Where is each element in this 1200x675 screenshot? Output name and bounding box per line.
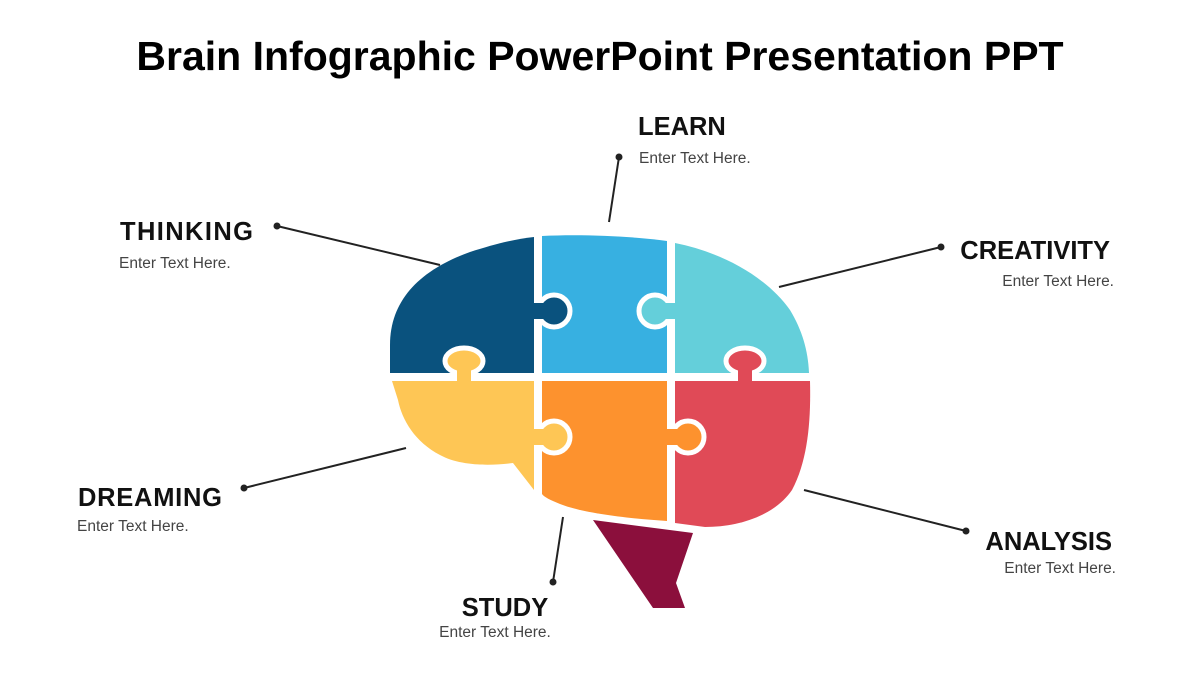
piece: dark blue (thinking)	[390, 237, 534, 373]
connector: thinking	[274, 222, 440, 265]
piece: teal (creativity)	[675, 243, 809, 373]
label: creativity: Enter Text Here.	[1002, 273, 1114, 290]
label: study: STUDY	[462, 594, 548, 622]
label: dreaming	[77, 484, 222, 535]
knob: yellow into dark blue	[445, 348, 483, 384]
brain puzzle	[390, 235, 810, 608]
piece: stem	[593, 520, 693, 608]
connector: dreaming	[240, 448, 406, 492]
knob: teal into light blue	[639, 295, 681, 327]
label: analysis	[985, 528, 1116, 577]
label: dreaming: Enter Text Here.	[77, 518, 189, 535]
label: analysis: Enter Text Here.	[1004, 560, 1116, 577]
label: study	[439, 594, 551, 641]
connector: creativity	[779, 244, 944, 287]
label: analysis: ANALYSIS	[985, 528, 1112, 556]
label: dreaming: DREAMING	[78, 484, 222, 512]
label: learn: Enter Text Here.	[639, 150, 751, 167]
knob: dark blue into light blue	[528, 295, 570, 327]
piece: light blue (learn)	[542, 235, 667, 373]
knob: yellow into orange	[528, 421, 570, 453]
piece: orange (study)	[542, 381, 667, 521]
label: learn	[638, 113, 751, 167]
label: thinking	[119, 218, 253, 272]
connector: analysis	[804, 490, 970, 534]
label: thinking: Enter Text Here.	[119, 255, 231, 272]
piece: yellow (dreaming)	[392, 381, 534, 490]
label: creativity: CREATIVITY	[960, 237, 1110, 265]
label: learn: LEARN	[638, 113, 726, 141]
knob: red into teal	[726, 348, 764, 384]
title: Brain Infographic PowerPoint Presentation PPT	[136, 33, 1064, 79]
connector: study	[550, 517, 563, 586]
connector: learn	[609, 154, 622, 222]
piece: red (analysis)	[675, 381, 810, 527]
label: study: Enter Text Here.	[439, 624, 551, 641]
knob: orange into red	[662, 421, 704, 453]
label: creativity	[960, 237, 1114, 290]
label: thinking: THINKING	[120, 218, 253, 246]
